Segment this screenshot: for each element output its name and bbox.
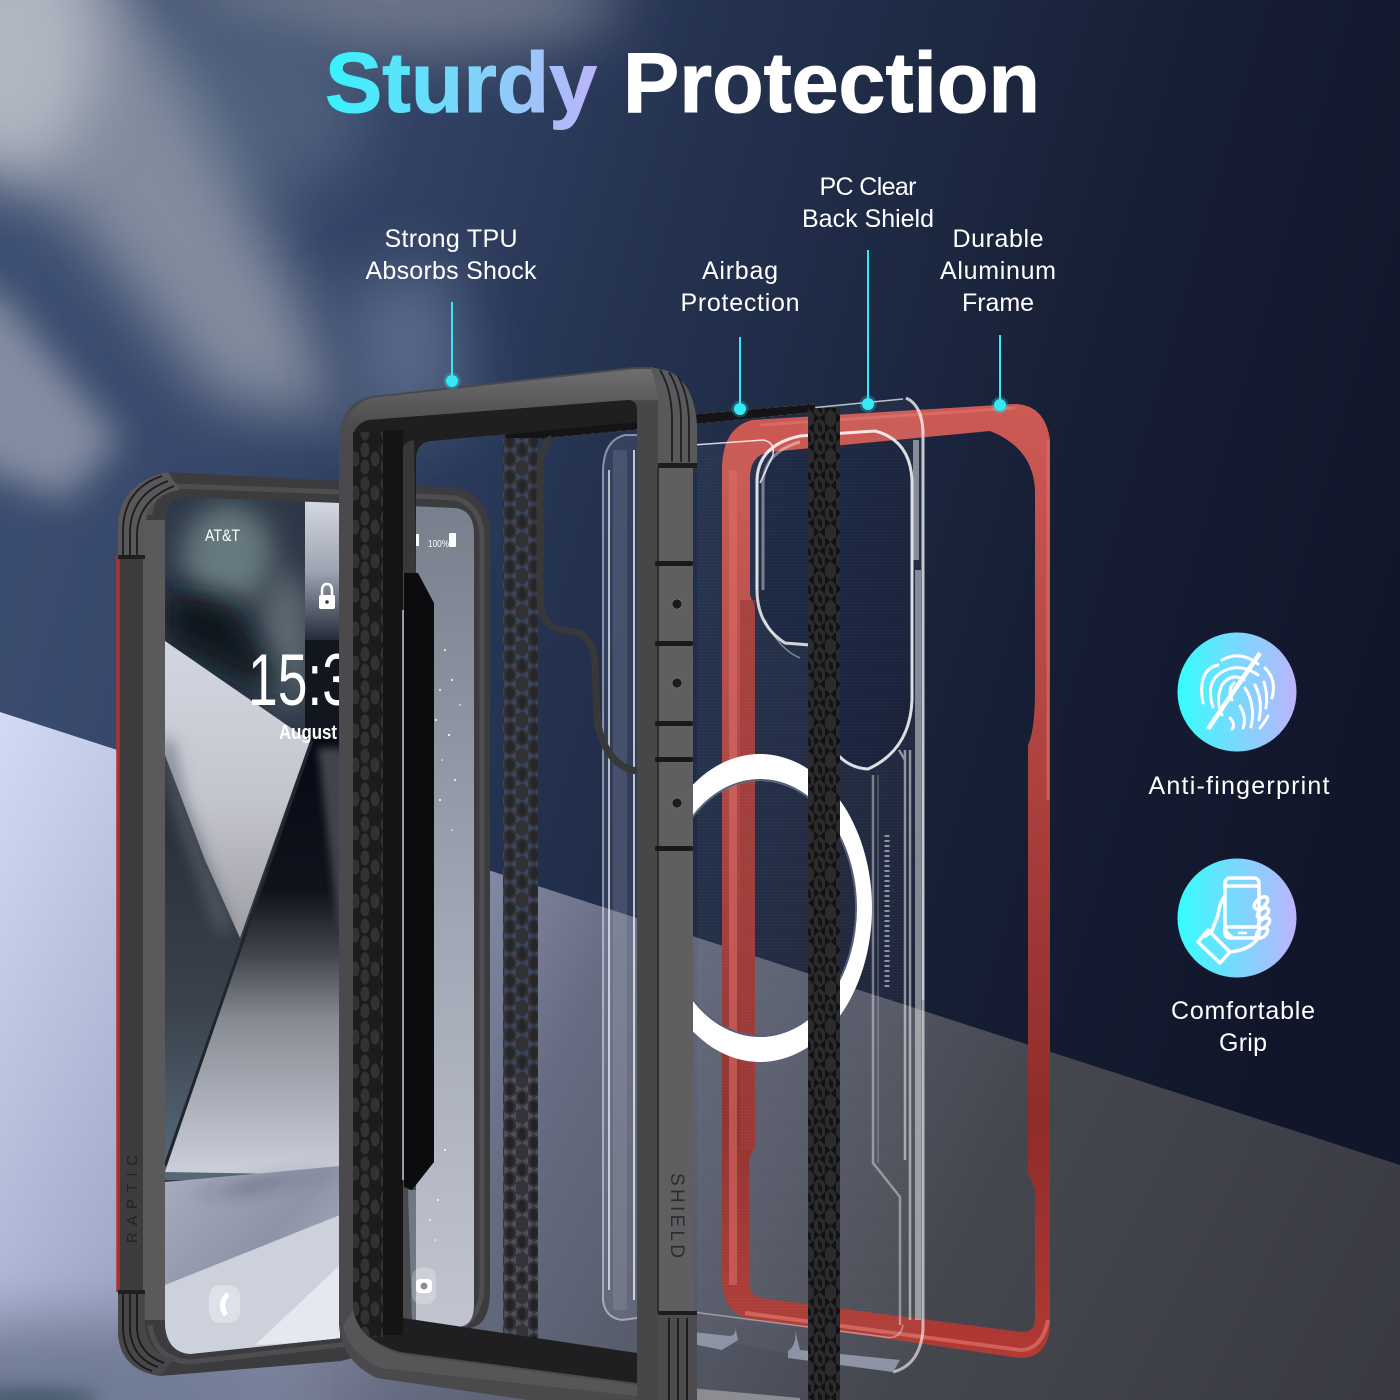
title word: Protection: Protection bbox=[623, 36, 1040, 131]
inner dark channel bbox=[353, 400, 637, 1383]
black inner tab bbox=[404, 573, 434, 1190]
panel: red aluminum frame bbox=[722, 404, 1050, 1358]
inner gray lip bbox=[403, 440, 416, 573]
shield translucent body bbox=[697, 398, 923, 1372]
label: Comfortable Grip: Comfortable bbox=[1171, 997, 1315, 1025]
bumper body bbox=[339, 367, 697, 1400]
callout: PC Clear Back Shield bbox=[802, 173, 934, 412]
icon: signal bbox=[416, 534, 419, 546]
side buttons grooves bbox=[655, 561, 693, 851]
carrier text: AT&T bbox=[205, 526, 240, 545]
glitter on screen bbox=[429, 649, 461, 1241]
label: Comfortable Grip bbox=[1171, 997, 1315, 1057]
right column bbox=[637, 402, 693, 1400]
callout: Durable Aluminum Frame: Durable bbox=[952, 225, 1044, 253]
label: Comfortable Grip: Grip bbox=[1219, 1029, 1267, 1057]
title word: Sturdy: Sturdy bbox=[325, 36, 597, 131]
panel: TPU bumper frame bbox=[339, 367, 697, 1400]
background bbox=[0, 0, 1175, 998]
black rail bbox=[383, 430, 403, 1335]
callout: PC Clear Back Shield: Back Shield bbox=[802, 205, 934, 233]
callout: Strong TPU bbox=[366, 225, 537, 390]
callout: Durable Aluminum Frame: Frame bbox=[962, 289, 1034, 317]
airbag vertical strip bbox=[808, 408, 840, 1400]
icon: battery bbox=[449, 533, 456, 547]
brand text on bumper: RAPTIC bbox=[124, 1155, 141, 1243]
hex cell column bbox=[353, 432, 383, 1337]
floor bbox=[0, 712, 1400, 1400]
left airbag strip bbox=[503, 438, 538, 1338]
callout: Durable Aluminum Frame bbox=[940, 225, 1056, 414]
panel: phone with frame bbox=[118, 472, 490, 1376]
left side of clear shield bbox=[603, 435, 637, 1320]
phone screen bbox=[165, 495, 476, 1360]
callout: Airbag Protection: Protection bbox=[680, 289, 800, 317]
callout: Strong TPU: Strong TPU bbox=[384, 225, 518, 253]
bottom mesh strip bbox=[690, 1388, 800, 1400]
bottom band bbox=[343, 1310, 637, 1396]
clock text: 15:3 bbox=[248, 640, 352, 721]
date text: August bbox=[279, 722, 337, 744]
battery text: 100% bbox=[428, 538, 449, 550]
icon: camera button bbox=[412, 1268, 436, 1304]
shield outlines bbox=[693, 398, 923, 1372]
top band bbox=[342, 369, 664, 440]
label: Anti-fingerprint: Anti-fingerprint bbox=[1148, 772, 1330, 800]
airbag top strip bbox=[505, 404, 815, 442]
callout: Airbag Protection bbox=[680, 257, 800, 418]
callout: PC Clear Back Shield: PC Clear bbox=[820, 173, 916, 201]
top-left corner ribs bbox=[118, 472, 180, 559]
bottom-left corner ribs bbox=[118, 1290, 175, 1376]
brand text: SHIELD: SHIELD bbox=[666, 1173, 687, 1258]
callout: Airbag Protection: Airbag bbox=[702, 257, 778, 285]
phone outer bumper bbox=[118, 472, 490, 1376]
icon: anti-fingerprint bbox=[1178, 632, 1296, 752]
camera cutout curve bbox=[540, 438, 636, 771]
bottom-right ribs bbox=[658, 1311, 697, 1400]
icon: comfortable grip bbox=[1178, 858, 1296, 978]
icon: lock bbox=[319, 584, 335, 609]
icon: call button bbox=[209, 1285, 240, 1323]
top-right ribs bbox=[650, 367, 697, 468]
title bbox=[325, 36, 1040, 131]
panel: PC clear back shield bbox=[693, 396, 924, 1374]
callout: Durable Aluminum Frame: Aluminum bbox=[940, 257, 1056, 285]
magnetic ring bbox=[693, 754, 872, 1062]
side screws bbox=[672, 599, 682, 808]
callout: Strong TPU: Absorbs Shock bbox=[366, 257, 537, 285]
bottom port lips bbox=[788, 1330, 900, 1372]
